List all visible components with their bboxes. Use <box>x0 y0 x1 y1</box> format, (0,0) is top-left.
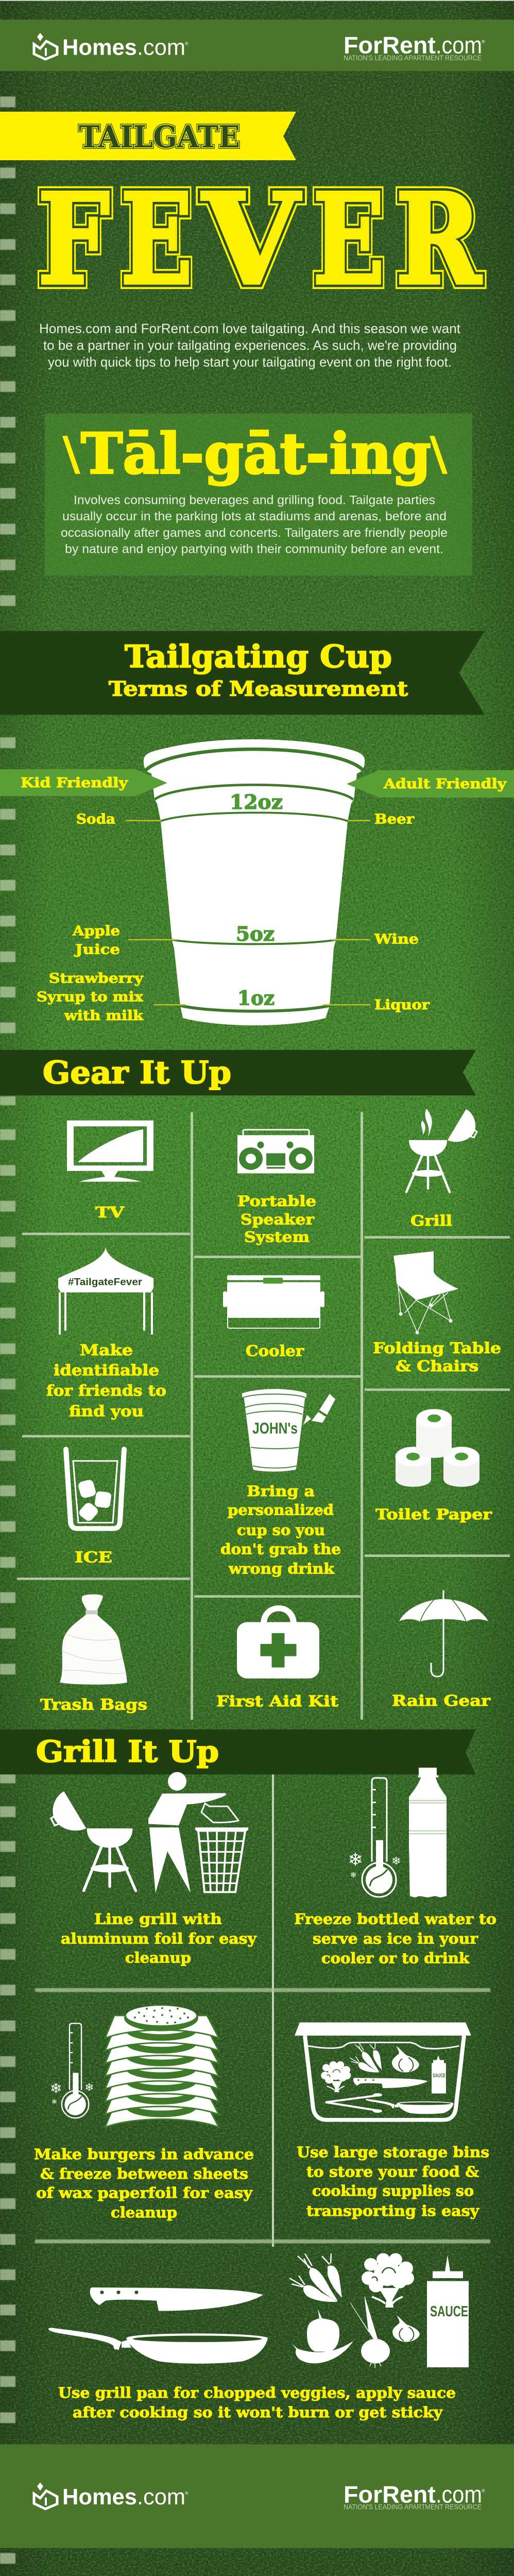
item: Portable Speaker System: Speaker <box>241 1211 315 1228</box>
title: FEVER: V <box>201 166 301 313</box>
icon: boombox <box>237 1130 314 1173</box>
icon: tent <box>58 1247 153 1334</box>
banner: Tailgating Cup Terms of Measurement: Tailgating Cup <box>125 639 392 675</box>
icon: garlic <box>392 2315 420 2342</box>
caption: after cooking so it won't burn or get sticky <box>73 2404 443 2421</box>
icon: cooler <box>223 1275 324 1328</box>
chart: measurement cup <box>0 739 514 1025</box>
item: Rain Gear <box>392 1590 491 1709</box>
item: ICE: ICE <box>75 1549 112 1566</box>
tip: line grill with foil: Line grill with <box>94 1910 222 1927</box>
banner: Grill It Up <box>0 1730 476 1774</box>
item: First Aid Kit <box>216 1608 339 1710</box>
icon: glass with ice <box>66 1449 124 1529</box>
logo: ForRent.com footer: ForRent <box>344 2481 436 2508</box>
arrow: Adult Friendly: Adult Friendly <box>383 776 507 792</box>
logo: ForRent.com footer: .com <box>436 2481 482 2508</box>
icon: JOHN's cup with marker: JOHN's <box>252 1419 298 1437</box>
title: FEVER: E <box>121 166 193 313</box>
item: personalized cup: don't grab the <box>220 1540 341 1557</box>
logo: ForRent.com <box>344 32 485 62</box>
item: Portable Speaker System: Portable <box>237 1193 316 1210</box>
title: FEVER: F <box>38 166 110 313</box>
item: Cooler: Cooler <box>246 1343 304 1360</box>
measure: 12oz: 12oz <box>230 791 283 814</box>
icon: small thermometer <box>50 2023 94 2118</box>
item: Make identifiable: identifiable <box>54 1362 159 1379</box>
logo: ForRent.com: ® <box>482 39 485 44</box>
title: FEVER: R <box>396 166 482 313</box>
icon: umbrella <box>399 1590 488 1676</box>
title: FEVER: F <box>38 166 110 313</box>
tip: freeze bottled water <box>294 1768 496 1967</box>
definition text <box>61 493 448 556</box>
item: personalized cup: cup so you <box>237 1521 325 1538</box>
tip: make burgers in advance: cleanup <box>111 2204 177 2221</box>
heading: Tailgating phonetic: \ <box>430 427 448 484</box>
tip: make burgers in advance: of wax paperfoil for easy <box>36 2184 253 2201</box>
title: FEVER: E <box>313 166 385 313</box>
icon: peppers <box>290 2309 353 2363</box>
gear grid lines <box>17 1112 510 1720</box>
icon: grill and figure at trash can <box>51 1772 248 1893</box>
intro text: to be a partner in your tailgating experiences. As such, we're providing <box>43 338 457 353</box>
tip: storage bins: transporting is easy <box>306 2202 480 2219</box>
definition text: by nature and enjoy partying with their community before an event. <box>65 542 443 556</box>
title banner: Tailgate: TAILGATE <box>79 120 240 155</box>
heading: Tailgating phonetic: \ <box>62 427 81 484</box>
icon: carrots <box>289 2253 342 2302</box>
definition text: Involves consuming beverages and grilling food. Tailgate parties <box>74 493 435 507</box>
banner: Grill It Up: Grill It Up <box>36 1734 219 1769</box>
tip: freeze bottled water: Freeze bottled water to <box>294 1910 496 1927</box>
tip: freeze bottled water: serve as ice in your <box>313 1930 478 1947</box>
logo: ForRent.com footer: NATION'S LEADING APARTMENT RESOURCE <box>344 2503 482 2511</box>
tip: storage bins: cooking supplies so <box>312 2182 474 2199</box>
title: FEVER: E <box>121 166 193 313</box>
label: Strawberry Syrup: Strawberry <box>49 971 144 986</box>
logo: Homes.com footer: Homes <box>62 2484 137 2510</box>
item: Folding Table and Chairs <box>373 1251 501 1375</box>
logo: ForRent.com footer <box>344 2481 485 2511</box>
icon: storage bin with supplies: SAUCE <box>433 2072 446 2079</box>
label: Strawberry Syrup: Syrup to mix <box>37 989 143 1005</box>
icon: trash bag <box>60 1595 127 1685</box>
title: FEVER: R <box>396 166 482 313</box>
logo: Homes.com footer <box>34 2482 189 2510</box>
icon: grill <box>406 1109 477 1192</box>
icon: broccoli <box>362 2253 414 2308</box>
title banner: Tailgate: TAILGATE <box>79 120 240 155</box>
caption: Use grill pan for chopped veggies, apply sauce <box>58 2384 456 2401</box>
icon: storage bin with supplies <box>295 2022 471 2120</box>
measure: 5oz: 5oz <box>236 923 275 946</box>
item: personalized cup: Bring a <box>247 1483 315 1500</box>
icon: sauce bottle: SAUCE <box>430 2304 468 2320</box>
banner: Gear It Up <box>0 1050 476 1095</box>
arrow: Kid Friendly: Kid Friendly <box>21 775 128 791</box>
icon: thermometer and bottle: ❄ <box>391 1855 401 1868</box>
tip: freeze bottled water: cooler or to drink <box>321 1950 470 1967</box>
item: Grill: Grill <box>410 1212 452 1229</box>
logo: ForRent.com: ForRent <box>344 32 436 59</box>
logo: Homes.com footer: .com <box>137 2484 185 2510</box>
item: Trash Bags: Trash Bags <box>40 1696 147 1714</box>
banner: Tailgating Cup Terms of Measurement: Terms of Measurement <box>109 677 408 701</box>
item: personalized cup: wrong drink <box>228 1560 335 1577</box>
icon: stack of burger patties <box>105 2005 219 2127</box>
arrow: Kid Friendly <box>0 769 167 796</box>
icon: thermometer and bottle <box>348 1768 447 1897</box>
item: Trash Bags <box>40 1595 147 1714</box>
tip: line grill with foil: cleanup <box>125 1949 191 1966</box>
logo: ForRent.com: NATION'S LEADING APARTMENT RESOURCE <box>344 54 482 62</box>
icon: small thermometer: ❄ <box>50 2081 62 2096</box>
title: FEVER: V <box>201 166 301 313</box>
label: Strawberry Syrup: with milk <box>64 1008 144 1024</box>
title banner: Tailgate: TAILGATE <box>79 120 240 155</box>
tip: storage bins <box>295 2022 489 2219</box>
label: Apple Juice: Juice <box>74 942 120 957</box>
item: TV: TV <box>95 1204 125 1221</box>
icon: knife <box>90 2287 263 2311</box>
heading: Tailgating phonetic: Tāl-gāt-ing <box>81 421 431 487</box>
tip: line grill with foil <box>51 1772 258 1966</box>
cup silhouette <box>144 739 365 1025</box>
title: FEVER <box>38 166 482 313</box>
tip: make burgers in advance: & freeze between sheets <box>40 2165 248 2182</box>
item: Rain Gear: Rain Gear <box>392 1692 491 1709</box>
intro text: you with quick tips to help start your tailgating event on the right foot. <box>48 354 452 369</box>
label: Apple Juice: Apple <box>72 923 120 939</box>
item: Cooler <box>223 1275 324 1360</box>
measure: 1oz: 1oz <box>237 987 275 1010</box>
label: Soda: Soda <box>76 811 115 827</box>
arrow: Adult Friendly <box>347 770 514 798</box>
tip: grill pan and sauce <box>48 2253 469 2421</box>
title: FEVER: E <box>313 166 385 313</box>
logo: Homes.com: ® <box>185 41 189 46</box>
icon: small thermometer: ❄ <box>84 2081 94 2094</box>
banner: Tailgating Cup Terms of Measurement <box>0 631 485 715</box>
tip: make burgers in advance <box>34 2005 254 2221</box>
logo: Homes.com: .com <box>137 35 185 60</box>
icon: thermometer and bottle: ❄ <box>350 1871 357 1879</box>
icon: JOHN's cup with marker <box>242 1389 335 1471</box>
logo: Homes.com: Homes <box>62 35 137 60</box>
item: Portable Speaker System <box>237 1130 316 1245</box>
item: Folding Table and Chairs: & Chairs <box>396 1358 478 1375</box>
icon: sauce bottle <box>427 2255 469 2367</box>
icon: small thermometer: ❄ <box>52 2098 57 2105</box>
item: Make identifiable: Make <box>80 1342 133 1359</box>
caption <box>58 2384 456 2421</box>
definition text: occasionally after games and concerts. Tailgaters are friendly people <box>61 526 448 540</box>
item: Toilet Paper <box>375 1409 492 1523</box>
icon: TV <box>67 1121 153 1182</box>
label: Beer: Beer <box>374 811 415 827</box>
tip: make burgers in advance: Make burgers in advance <box>34 2145 254 2163</box>
intro text: Homes.com and ForRent.com love tailgating. And this season we want <box>39 321 461 336</box>
item: First Aid Kit: First Aid Kit <box>216 1693 339 1710</box>
title: FEVER: E <box>121 166 193 313</box>
intro text <box>39 321 461 369</box>
tip: storage bins: Use large storage bins <box>297 2144 489 2161</box>
title: FEVER: E <box>313 166 385 313</box>
icon: thermometer and bottle: ❄ <box>348 1850 363 1870</box>
logo: ForRent.com footer: ® <box>482 2488 485 2493</box>
logo: Homes.com footer: ® <box>185 2490 189 2496</box>
leader lines <box>126 821 370 1005</box>
title: FEVER: F <box>38 166 110 313</box>
footer bar with logos <box>0 2444 514 2548</box>
label: Liquor: Liquor <box>374 997 430 1013</box>
title banner: Tailgate <box>0 112 296 160</box>
icon: tent: #TailgateFever <box>68 1277 142 1287</box>
definition text: usually occur in the parking lots at stadiums and arenas, before and <box>62 509 447 523</box>
logo: Homes.com <box>34 33 189 60</box>
icon: onion <box>350 2297 390 2368</box>
banner: Gear It Up: Gear It Up <box>43 1055 231 1091</box>
icon: folding chair <box>393 1251 458 1334</box>
tip: storage bins: to store your food & <box>306 2163 479 2180</box>
item: personalized cup <box>220 1389 341 1577</box>
title: FEVER: R <box>396 166 482 313</box>
item: Make identifiable <box>46 1247 166 1420</box>
item: Make identifiable: find you <box>69 1403 144 1420</box>
grill grid lines <box>35 1774 490 2247</box>
icon: grill pan <box>48 2328 268 2364</box>
label: Wine: Wine <box>374 931 419 947</box>
item: Make identifiable: for friends to <box>46 1382 166 1399</box>
label: Strawberry Syrup <box>37 971 144 1024</box>
icon: toilet paper rolls <box>396 1409 479 1487</box>
header bar with logos <box>0 20 514 71</box>
logo: ForRent.com: .com <box>436 32 482 59</box>
panel: definition of tailgating <box>45 414 472 575</box>
item: Toilet Paper: Toilet Paper <box>375 1506 492 1523</box>
item: Folding Table and Chairs: Folding Table <box>373 1340 501 1357</box>
item: Portable Speaker System: System <box>244 1228 310 1245</box>
item: TV <box>67 1121 153 1221</box>
label: Apple Juice <box>72 923 120 957</box>
item: personalized cup: personalized <box>228 1501 334 1518</box>
tip: line grill with foil: aluminum foil for easy <box>61 1930 258 1947</box>
icon: first aid kit <box>237 1608 319 1679</box>
item: Grill <box>406 1109 477 1229</box>
title: FEVER: V <box>201 166 301 313</box>
item: ICE <box>66 1449 124 1566</box>
